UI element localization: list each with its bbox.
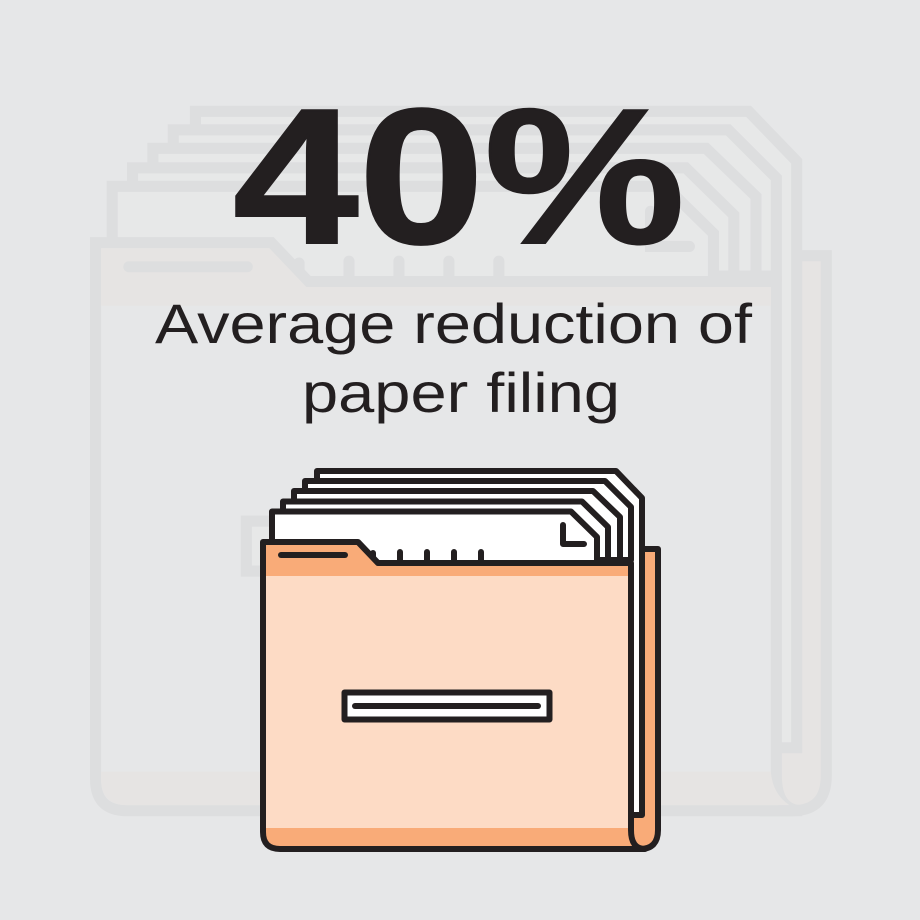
paper sheet 1 bbox=[317, 471, 642, 815]
folder label bbox=[344, 692, 550, 720]
paper sheet 4 bbox=[283, 502, 608, 560]
paper sheet 5 bbox=[272, 512, 597, 563]
folder tab line bbox=[281, 552, 345, 558]
icon: foreground folder with papers bbox=[263, 471, 658, 849]
icon: ghost background folder bbox=[96, 111, 826, 811]
paper corner mark and ticks bbox=[373, 525, 584, 562]
subtitle line 2: paper filing bbox=[302, 361, 620, 424]
folder back panel bbox=[625, 549, 658, 849]
subtitle line 1: Average reduction of bbox=[155, 292, 753, 355]
folder front pocket bbox=[263, 542, 645, 849]
paper sheet 3 bbox=[294, 491, 620, 560]
headline: 40%: 40% bbox=[233, 68, 685, 284]
paper sheet 2 bbox=[305, 481, 631, 560]
